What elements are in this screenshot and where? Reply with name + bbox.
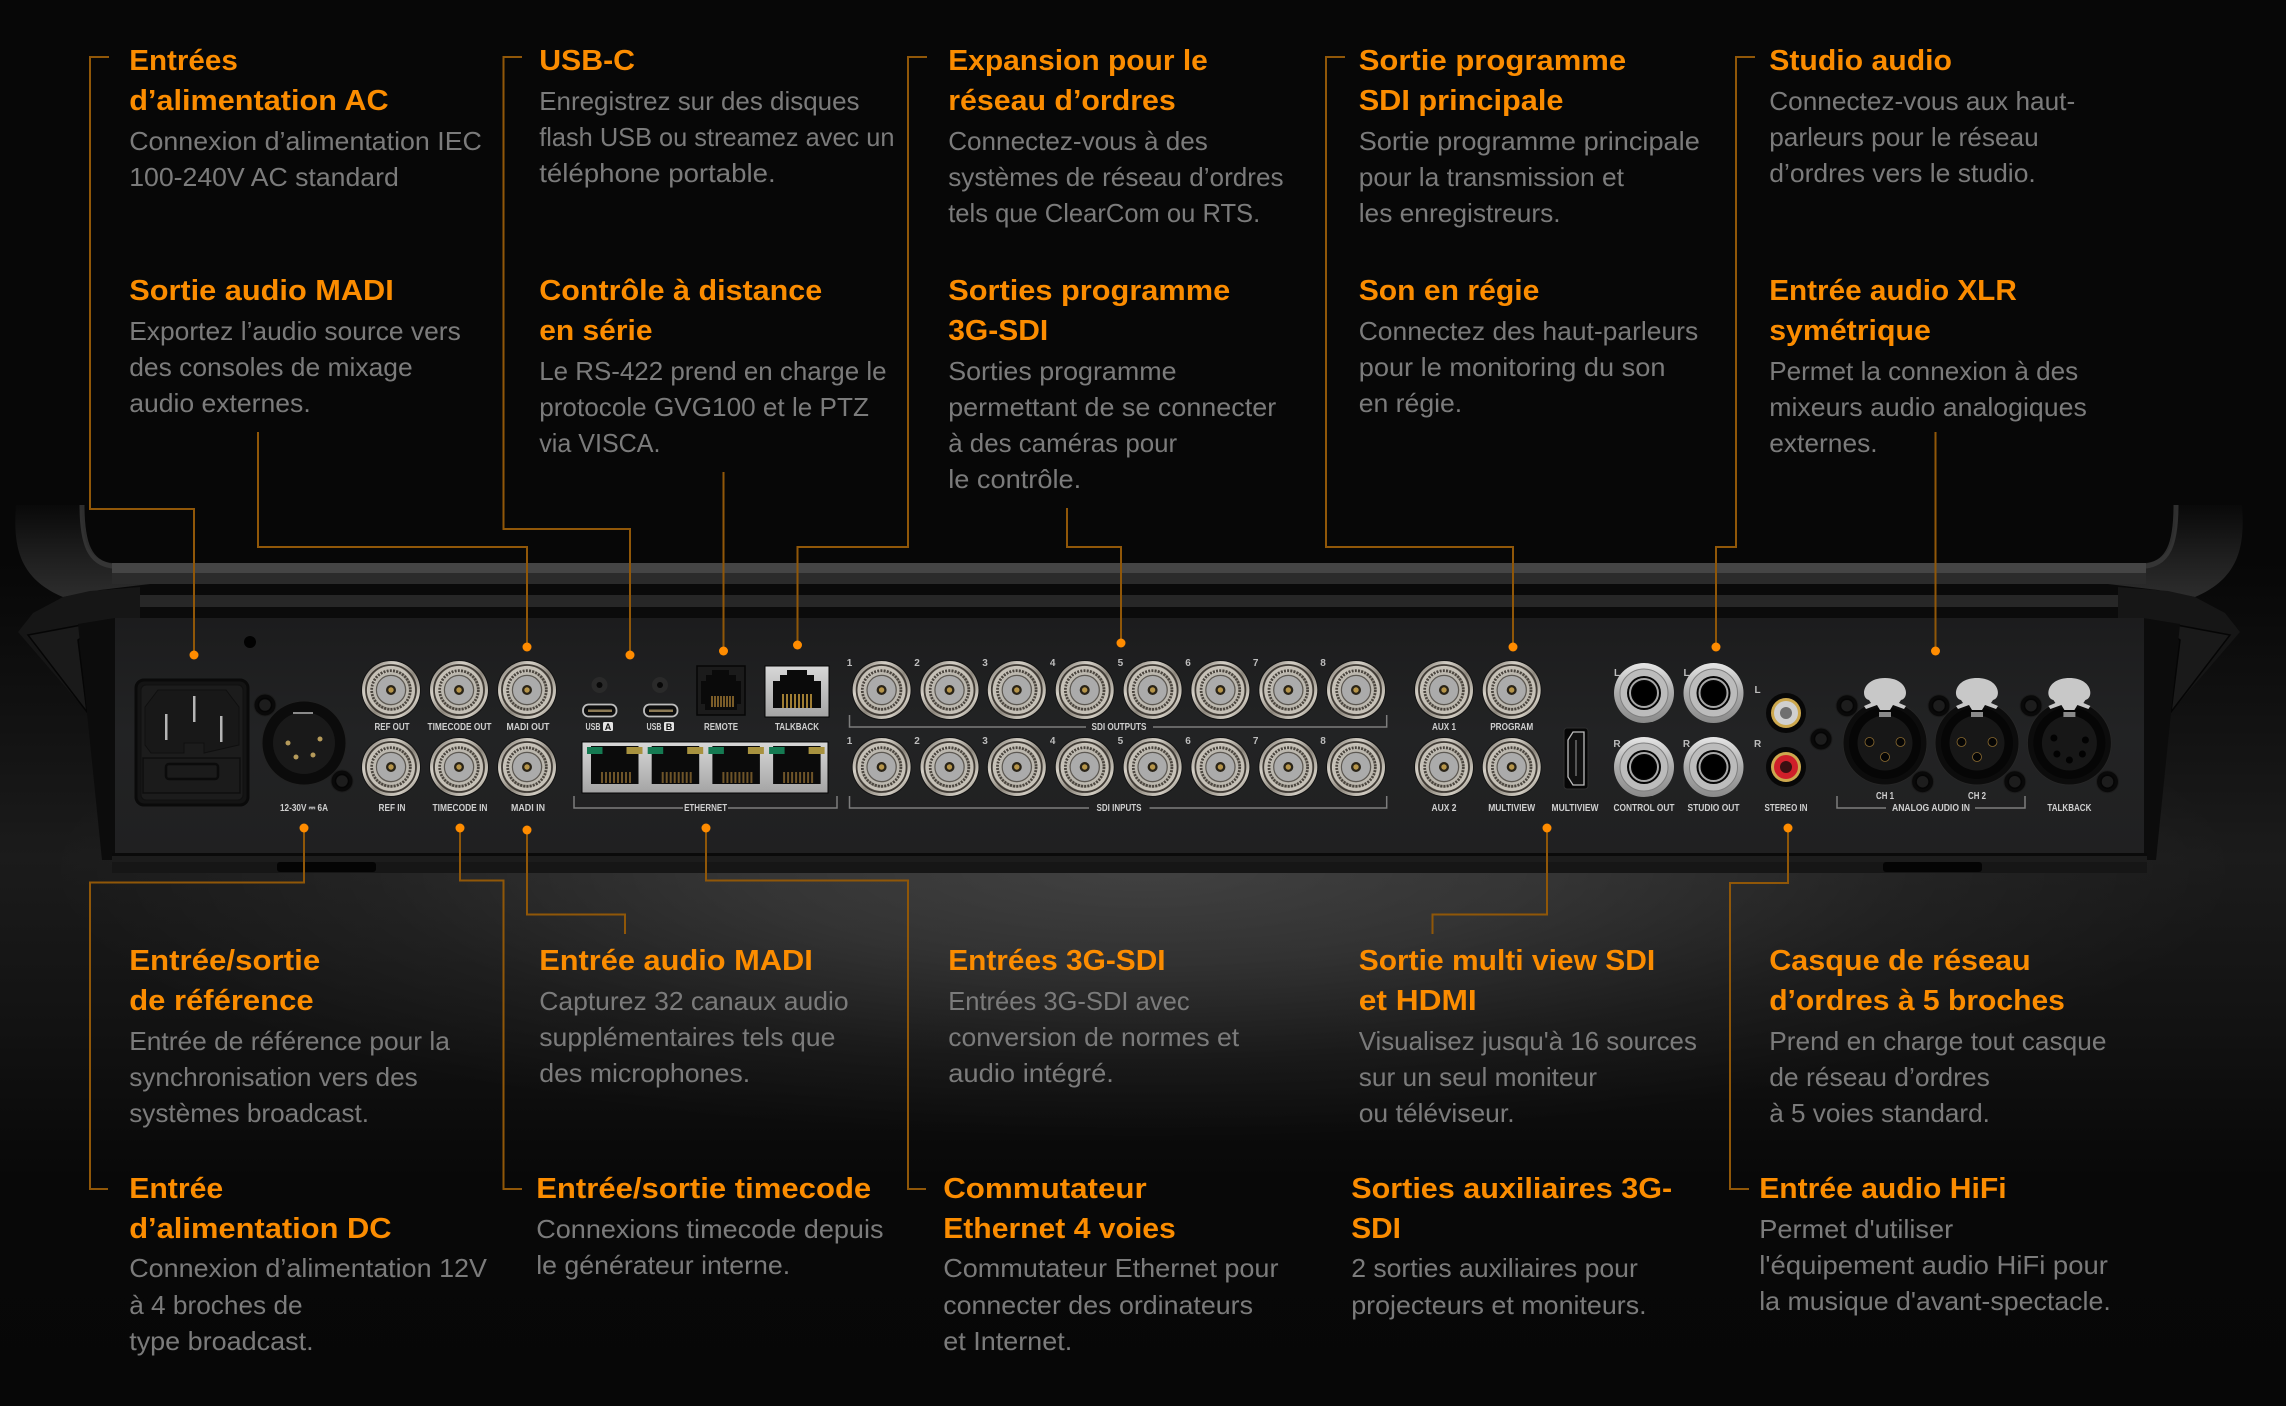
panel printed labels: REF OUT <box>374 721 410 733</box>
panel printed labels: TIMECODE OUT <box>428 721 492 733</box>
text block: Sorties programme 3G-SDI: à des caméras pour <box>948 428 1178 458</box>
panel printed labels: ETHERNET <box>684 802 728 814</box>
panel label brackets <box>574 715 2025 808</box>
text block: Sorties programme 3G-SDI: permettant de se connecter <box>948 392 1277 422</box>
text block: Sorties auxiliaires 3G-SDI: projecteurs et moniteurs. <box>1351 1290 1647 1320</box>
panel printed labels: CH 2 <box>1968 790 1986 802</box>
text block: Entrée audio HiFi: Entrée audio HiFi <box>1759 1173 2007 1205</box>
text block: Entrée audio HiFi <box>1759 1173 2111 1316</box>
callout: Entrée audio XLR symétrique <box>1931 432 1940 656</box>
callout: multiview <box>1432 824 1552 934</box>
text block: Sortie multi view SDI et HDMI: sur un seul moniteur <box>1359 1062 1597 1092</box>
HDMI port <box>1564 728 1588 789</box>
panel printed labels: AUX 1 <box>1432 721 1456 733</box>
text block: Sortie audio MADI: Exportez l’audio source vers <box>129 316 461 346</box>
text block: Entrée d'alimentation DC: type broadcast. <box>129 1326 314 1356</box>
panel printed labels: 12-30V ⎓ 6A <box>280 802 328 814</box>
panel printed labels: TALKBACK <box>775 721 819 733</box>
SDI input BNC row <box>852 737 1386 797</box>
text block: Entrées d'alimentation AC: Entrées <box>129 45 238 77</box>
text block: Expansion pour le réseau d'ordres: réseau d’ordres <box>948 85 1176 117</box>
panel printed labels: ANALOG AUDIO IN <box>1892 802 1970 814</box>
text block: Sorties auxiliaires 3G-SDI: SDI <box>1351 1213 1401 1245</box>
callout: Sortie audio MADI <box>258 432 532 652</box>
panel printed labels: 2 <box>914 658 920 669</box>
text block: Sortie audio MADI: audio externes. <box>129 388 311 418</box>
text block: Sorties programme 3G-SDI: 3G-SDI <box>948 315 1048 347</box>
text block: Entrée d'alimentation DC: Entrée <box>129 1173 223 1205</box>
panel printed labels: 2 <box>914 736 920 747</box>
text block: Sorties programme 3G-SDI <box>948 275 1277 494</box>
text block: Sorties auxiliaires 3G-SDI: 2 sorties auxiliaires pour <box>1351 1253 1638 1283</box>
text block: Sortie audio MADI: Sortie audio MADI <box>129 275 394 307</box>
text block: Contrôle à distance en série: protocole GVG100 et le PTZ <box>539 392 869 422</box>
text block: Entrée/sortie de référence: Entrée/sortie <box>129 945 320 977</box>
XLR CH 2 <box>1928 678 2026 793</box>
text block: Contrôle à distance en série: Le RS-422 prend en charge le <box>539 356 886 386</box>
panel printed labels: 5 <box>1118 736 1124 747</box>
callout: HiFi and headset <box>1730 824 1792 1189</box>
panel printed labels: STUDIO OUT <box>1688 802 1740 814</box>
panel printed labels: L <box>1614 668 1620 679</box>
text block: Contrôle à distance en série: en série <box>539 315 652 347</box>
XLR CH 1 <box>1836 678 1934 793</box>
panel printed labels: 5 <box>1118 658 1124 669</box>
text block: Entrée d'alimentation DC: d’alimentation DC <box>129 1213 392 1245</box>
TRS jacks: control and studio out <box>1614 663 1744 797</box>
text block: Entrée/sortie timecode: Entrée/sortie timecode <box>536 1173 871 1205</box>
panel printed labels: 4 <box>1050 736 1056 747</box>
text block: Sorties programme 3G-SDI: le contrôle. <box>948 464 1081 494</box>
text block: Sortie multi view SDI et HDMI: ou téléviseur. <box>1359 1098 1515 1128</box>
panel printed labels: L <box>1683 668 1690 679</box>
panel printed labels: MULTIVIEW <box>1552 802 1599 814</box>
panel printed labels: MADI OUT <box>506 721 550 733</box>
text block: Expansion pour le réseau d'ordres: systèmes de réseau d’ordres <box>948 162 1284 192</box>
text block: Casque de réseau d'ordres à 5 broches: Prend en charge tout casque <box>1769 1026 2107 1056</box>
text block: Studio audio: Studio audio <box>1769 45 1952 77</box>
text block: Entrée audio XLR symétrique: Entrée audio XLR <box>1769 275 2017 307</box>
callout: Ethernet <box>702 824 926 1189</box>
text block: Entrée audio MADI <box>539 945 849 1088</box>
RCA stereo in <box>1766 693 1832 787</box>
XLR talkback 5-pin <box>2020 678 2118 793</box>
text block: Entrée audio HiFi: l'équipement audio HiFi pour <box>1759 1250 2108 1280</box>
Ethernet switch ports <box>582 742 828 793</box>
text block: Entrée/sortie timecode: Connexions timecode depuis <box>536 1214 883 1244</box>
text block: Expansion pour le réseau d'ordres <box>948 45 1284 228</box>
panel printed labels: B <box>666 722 673 732</box>
callout: Sorties programme 3G-SDI <box>1067 508 1126 648</box>
text block: Entrée/sortie de référence: synchronisation vers des <box>129 1062 418 1092</box>
text block: Casque de réseau d'ordres à 5 broches <box>1769 945 2106 1128</box>
text block: Entrées d'alimentation AC <box>129 45 482 192</box>
callout: Entrées d'alimentation AC <box>90 57 198 660</box>
panel printed labels: TIMECODE IN <box>432 802 488 814</box>
text block: Entrée audio MADI: Capturez 32 canaux audio <box>539 986 849 1016</box>
text block: USB-C: Enregistrez sur des disques <box>539 86 859 116</box>
text block: Entrée audio XLR symétrique: externes. <box>1769 428 1878 458</box>
panel printed labels: STEREO IN <box>1764 802 1808 814</box>
text block: Commutateur Ethernet 4 voies: Commutateur <box>943 1173 1147 1205</box>
text block: Commutateur Ethernet 4 voies: Ethernet 4 voies <box>943 1213 1176 1245</box>
RJ45 talkback port <box>765 666 829 717</box>
panel printed labels <box>280 658 2092 814</box>
text block: Son en régie: Connectez des haut-parleurs <box>1359 316 1698 346</box>
text block: Studio audio: d’ordres vers le studio. <box>1769 158 2036 188</box>
text block: Entrée audio HiFi: Permet d'utiliser <box>1759 1214 1954 1244</box>
text block: USB-C: flash USB ou streamez avec un <box>539 122 894 152</box>
text block: Contrôle à distance en série: via VISCA. <box>539 428 660 458</box>
text block: Sorties auxiliaires 3G-SDI: Sorties auxiliaires 3G- <box>1351 1173 1672 1205</box>
text block: Entrée audio XLR symétrique: mixeurs audio analogiques <box>1769 392 2087 422</box>
panel printed labels: R <box>1754 739 1762 750</box>
text block: Sortie programme SDI principale: Sortie programme <box>1359 45 1626 77</box>
text block: Casque de réseau d'ordres à 5 broches: Casque de réseau <box>1769 945 2031 977</box>
text block: Sortie programme SDI principale: SDI principale <box>1359 85 1564 117</box>
SDI output BNC row <box>852 660 1386 720</box>
callout lines and dots <box>90 57 1940 1189</box>
panel printed labels: PROGRAM <box>1490 721 1533 733</box>
text block: Entrée audio XLR symétrique: Permet la connexion à des <box>1769 356 2078 386</box>
text block: Entrées d'alimentation AC: d’alimentation AC <box>129 85 389 117</box>
text block: Entrée/sortie de référence: Entrée de référence pour la <box>129 1026 450 1056</box>
text block: Entrées d'alimentation AC: 100-240V AC standard <box>129 162 399 192</box>
text block: Studio audio: parleurs pour le réseau <box>1769 122 2039 152</box>
text block: Sortie multi view SDI et HDMI: Sortie multi view SDI <box>1359 945 1655 977</box>
panel printed labels: TALKBACK <box>2047 802 2092 814</box>
text block: Son en régie: pour le monitoring du son <box>1359 352 1666 382</box>
RJ45 remote port <box>697 666 745 715</box>
text block: Entrées 3G-SDI: Entrées 3G-SDI avec <box>948 986 1190 1016</box>
text block: Entrée d'alimentation DC: Connexion d’alimentation 12V <box>129 1253 488 1283</box>
callout: Entrée de référence et DC <box>90 824 308 1189</box>
bottom lip and feet <box>112 853 2147 873</box>
panel printed labels: 3 <box>982 658 988 669</box>
text block: Entrée audio XLR symétrique: symétrique <box>1769 315 1931 347</box>
text block: Entrée audio MADI: des microphones. <box>539 1058 750 1088</box>
text block: Entrée audio MADI: supplémentaires tels que <box>539 1022 835 1052</box>
BNC connectors: reference, timecode, MADI <box>361 660 557 797</box>
text block: Entrées 3G-SDI: Entrées 3G-SDI <box>948 945 1166 977</box>
text block: Commutateur Ethernet 4 voies: connecter des ordinateurs <box>943 1290 1253 1320</box>
text block: Entrée/sortie timecode <box>536 1173 884 1280</box>
text block: Son en régie: Son en régie <box>1359 275 1539 307</box>
icon: DC XLR power connector <box>254 694 353 792</box>
text block: Casque de réseau d'ordres à 5 broches: de réseau d’ordres <box>1769 1062 1990 1092</box>
icon: IEC power inlet <box>136 680 248 805</box>
panel printed labels: 1 <box>847 736 853 747</box>
text block: USB-C: USB-C <box>539 45 635 77</box>
mounting hole <box>244 636 256 648</box>
panel printed labels: USB <box>586 721 601 733</box>
text block: Sortie audio MADI <box>129 275 461 418</box>
panel printed labels: 1 <box>847 658 853 669</box>
text block: Commutateur Ethernet 4 voies: et Internet. <box>943 1326 1072 1356</box>
text block: Sortie multi view SDI et HDMI: Visualisez jusqu'à 16 sources <box>1359 1026 1697 1056</box>
callout: Studio audio <box>1712 57 1755 652</box>
text block: Entrée d'alimentation DC <box>129 1173 488 1356</box>
text block: Sorties programme 3G-SDI: Sorties programme <box>948 356 1177 386</box>
text block: Sortie programme SDI principale: les enregistreurs. <box>1359 198 1561 228</box>
text block: Entrée d'alimentation DC: à 4 broches de <box>129 1290 303 1320</box>
text block: Entrée audio XLR symétrique <box>1769 275 2087 458</box>
text block: Commutateur Ethernet 4 voies <box>943 1173 1279 1356</box>
text block: Sortie programme SDI principale <box>1359 45 1700 228</box>
panel printed labels: SDI INPUTS <box>1096 802 1142 814</box>
panel printed labels: L <box>1755 685 1761 696</box>
text block: Sortie programme SDI principale: pour la transmission et <box>1359 162 1625 192</box>
panel printed labels: 7 <box>1253 736 1259 747</box>
text block: Expansion pour le réseau d'ordres: tels que ClearCom ou RTS. <box>948 198 1260 228</box>
panel printed labels: 8 <box>1320 658 1326 669</box>
panel printed labels: REF IN <box>378 802 406 814</box>
text block: Expansion pour le réseau d'ordres: Expansion pour le <box>948 45 1208 77</box>
panel printed labels: MULTIVIEW <box>1488 802 1535 814</box>
text block: Casque de réseau d'ordres à 5 broches: d’ordres à 5 broches <box>1769 985 2065 1017</box>
text block: USB-C <box>539 45 894 188</box>
callout: USB-C <box>504 57 634 660</box>
text block: Casque de réseau d'ordres à 5 broches: à 5 voies standard. <box>1769 1098 1990 1128</box>
text block: Sortie programme SDI principale: Sortie programme principale <box>1359 126 1700 156</box>
panel printed labels: USB <box>646 721 662 733</box>
text block: Entrées 3G-SDI: audio intégré. <box>948 1058 1114 1088</box>
text block: Son en régie: en régie. <box>1359 388 1462 418</box>
panel printed labels: CH 1 <box>1876 790 1894 802</box>
text block: Entrée audio HiFi: la musique d'avant-spectacle. <box>1759 1286 2111 1316</box>
text block: Sortie multi view SDI et HDMI: et HDMI <box>1359 985 1477 1017</box>
panel printed labels: 7 <box>1253 658 1259 669</box>
panel printed labels: 6 <box>1185 658 1191 669</box>
text block: Entrées 3G-SDI <box>948 945 1240 1088</box>
callout: Sortie programme SDI principale <box>1326 57 1518 652</box>
text block: Entrées 3G-SDI: conversion de normes et <box>948 1022 1240 1052</box>
text block: Contrôle à distance en série: Contrôle à distance <box>539 275 822 307</box>
text block: Studio audio: Connectez-vous aux haut- <box>1769 86 2075 116</box>
panel printed labels: 8 <box>1320 736 1326 747</box>
panel printed labels: MADI IN <box>511 802 545 814</box>
text block: Entrée/sortie de référence: systèmes broadcast. <box>129 1098 369 1128</box>
text block: Sorties programme 3G-SDI: Sorties programme <box>948 275 1230 307</box>
text block: Contrôle à distance en série <box>539 275 886 458</box>
handle and top strips <box>15 505 2243 618</box>
text block: Studio audio <box>1769 45 2075 188</box>
panel printed labels: 6 <box>1185 736 1191 747</box>
side wings <box>18 587 2240 860</box>
panel printed labels: R <box>1683 739 1691 750</box>
panel printed labels: REMOTE <box>704 721 738 733</box>
panel printed labels: SDI OUTPUTS <box>1092 721 1146 733</box>
panel printed labels: R <box>1613 739 1621 750</box>
panel printed labels: AUX 2 <box>1432 802 1457 814</box>
panel printed labels: 4 <box>1050 658 1056 669</box>
aux, program and multiview BNC <box>1414 660 1542 797</box>
text block: Expansion pour le réseau d'ordres: Connectez-vous à des <box>948 126 1208 156</box>
text block: Entrée/sortie timecode: le générateur interne. <box>536 1250 790 1280</box>
text block: Sortie multi view SDI et HDMI <box>1359 945 1697 1128</box>
text block: Entrée/sortie de référence: de référence <box>129 985 314 1017</box>
panel printed labels: 3 <box>982 736 988 747</box>
panel face <box>115 618 2144 853</box>
text block: Sortie audio MADI: des consoles de mixage <box>129 352 413 382</box>
text block: USB-C: téléphone portable. <box>539 158 776 188</box>
panel printed labels: CONTROL OUT <box>1614 802 1675 814</box>
callout: Contrôle à distance <box>719 472 728 656</box>
callout: MADI in <box>522 826 625 934</box>
callout: Expansion pour le réseau d'ordres <box>793 57 927 650</box>
callout: timecode <box>456 824 522 1189</box>
text block: Entrées d'alimentation AC: Connexion d’alimentation IEC <box>129 126 482 156</box>
text block: Entrée/sortie de référence <box>129 945 450 1128</box>
panel printed labels: A <box>605 722 612 732</box>
USB ports <box>583 677 678 731</box>
device: rear panel <box>15 505 2243 873</box>
text block: Sorties auxiliaires 3G-SDI <box>1351 1173 1672 1320</box>
text block: Son en régie <box>1359 275 1698 418</box>
text block: Entrée audio MADI: Entrée audio MADI <box>539 945 813 977</box>
text block: Commutateur Ethernet 4 voies: Commutateur Ethernet pour <box>943 1253 1279 1283</box>
